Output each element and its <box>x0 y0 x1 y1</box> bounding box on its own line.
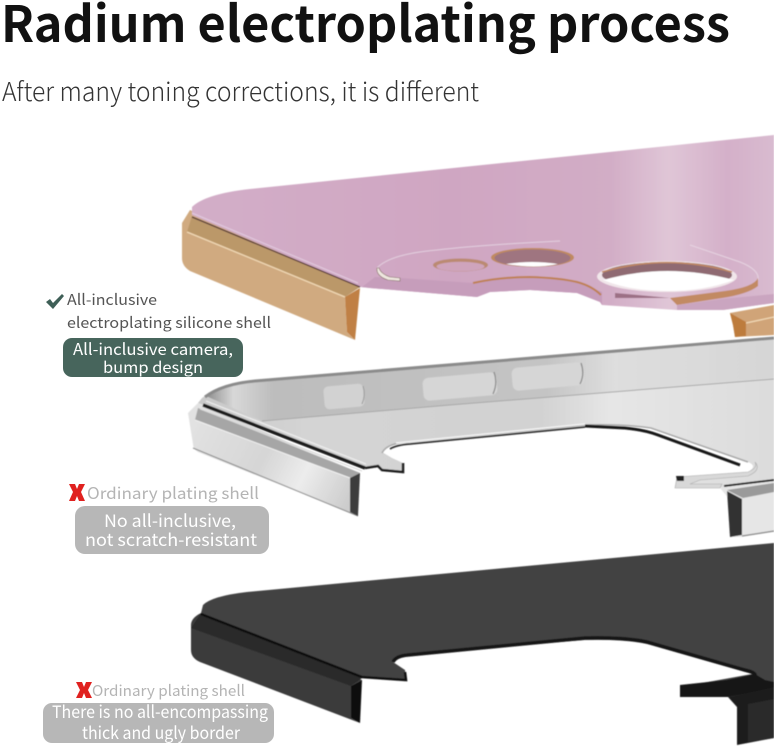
label: ordinary plating shell: Ordinary plating shell <box>92 680 245 701</box>
plate edge shadow <box>192 217 360 287</box>
callout: ordinary plating shell two <box>43 680 274 744</box>
clear back plate <box>198 337 774 488</box>
gold side wall <box>182 210 360 340</box>
right copper edge <box>670 278 758 305</box>
label: electroplating silicone shell: electroplating silicone shell <box>67 312 271 333</box>
clear side end cap <box>350 473 360 516</box>
badge text line 2: thick and ugly border <box>82 719 240 744</box>
badge text line 1: All-inclusive camera, <box>73 336 233 360</box>
badge: grey <box>43 703 274 743</box>
camera edge thickness <box>362 277 602 305</box>
panel: black ordinary plating shell <box>191 543 774 745</box>
clear top rim <box>205 338 774 397</box>
gold right wall <box>730 305 774 337</box>
icon: red cross <box>76 682 92 698</box>
pink back plate <box>192 135 774 310</box>
black right tab <box>680 674 774 697</box>
badge text line 2: not scratch-resistant <box>85 526 258 551</box>
lens hole small <box>433 258 488 272</box>
panel: pink electroplated shell <box>182 135 774 340</box>
black side end cap <box>351 680 362 723</box>
side button recess volume <box>323 383 365 410</box>
panel: clear ordinary plating shell <box>188 337 774 537</box>
badge: green <box>63 338 243 377</box>
lens hole medium <box>491 248 574 267</box>
camera island rim <box>377 241 560 268</box>
icon: red cross <box>69 484 85 501</box>
side button recess power <box>422 372 498 401</box>
gold side end cap <box>345 288 360 340</box>
callout: ordinary plating shell one <box>69 480 269 554</box>
black back plate <box>201 543 774 697</box>
badge: grey <box>75 506 269 554</box>
clear side wall <box>188 403 360 516</box>
cutout chrome edge <box>382 425 748 462</box>
badge text line 1: There is no all-encompassing <box>52 698 268 723</box>
clear upper band <box>206 337 774 421</box>
clear right lip <box>675 462 757 488</box>
icon: check mark <box>46 294 64 309</box>
label: ordinary plating shell: Ordinary plating shell <box>87 480 259 504</box>
subtitle: After many toning corrections, it is different <box>2 72 479 109</box>
callout: all-inclusive electroplating shell <box>46 289 271 378</box>
badge text line 1: No all-inclusive, <box>104 507 236 532</box>
copper camera bump edge <box>473 277 601 295</box>
side button recess silent <box>511 362 585 391</box>
label: all-inclusive: All-inclusive <box>67 289 157 310</box>
dark inner lip <box>203 405 365 468</box>
badge text line 2: bump design <box>103 354 203 378</box>
black side wall <box>191 613 362 723</box>
camera edge highlight <box>377 268 400 281</box>
black right wall <box>728 687 774 745</box>
black cutout lip <box>393 638 755 687</box>
lens hole large <box>597 261 737 292</box>
clear right wall <box>720 480 774 537</box>
